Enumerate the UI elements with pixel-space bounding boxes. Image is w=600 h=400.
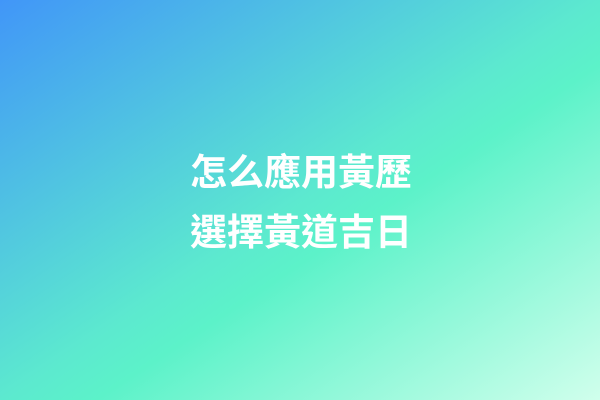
title: 怎么應用黃歷: [190, 152, 412, 193]
title: 選擇黃道吉日: [190, 212, 412, 253]
title: [190, 152, 412, 253]
